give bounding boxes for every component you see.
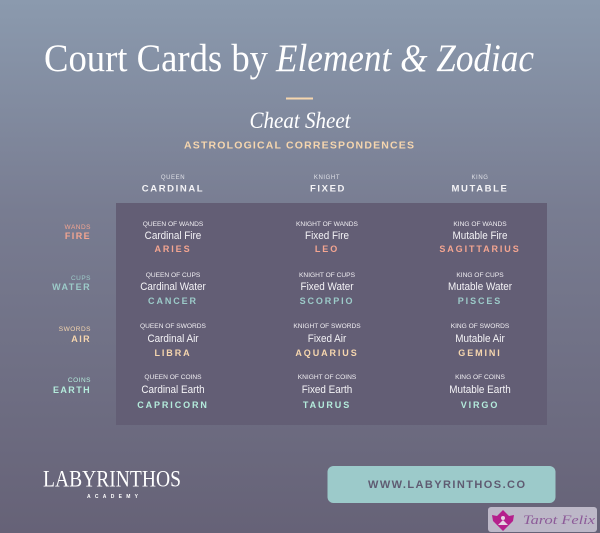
row labels: FIRE [65, 231, 91, 241]
row labels: SWORDS [59, 326, 91, 333]
panel: table background [116, 203, 547, 425]
row: earth: QUEEN OF COINS [144, 374, 202, 381]
row: earth: Mutable Earth [449, 385, 511, 396]
subheading: ASTROLOGICAL CORRESPONDENCES [184, 140, 414, 152]
row: air: QUEEN OF SWORDS [140, 323, 207, 330]
row: fire: Cardinal Fire [145, 231, 201, 242]
row: air: Cardinal Air [147, 334, 199, 345]
title [44, 37, 534, 80]
logo: Labyrinthos Academy: ACADEMY [87, 494, 139, 500]
website button: WWW.LABYRINTHOS.CO [368, 479, 525, 491]
row: water: Mutable Water [448, 282, 512, 293]
row: earth: Cardinal Earth [141, 385, 205, 396]
row labels: WANDS [65, 224, 91, 231]
column headers: MUTABLE [452, 184, 508, 194]
column headers: CARDINAL [142, 184, 204, 194]
row: fire: LEO [315, 244, 339, 254]
row: water: Cardinal Water [140, 282, 206, 293]
row labels: AIR [71, 334, 91, 344]
column headers: QUEEN [161, 175, 185, 181]
row: water [140, 272, 512, 306]
logo: Labyrinthos Academy: LABYRINTHOS [43, 466, 181, 492]
row: air: KNIGHT OF SWORDS [293, 323, 361, 330]
row labels: COINS [68, 377, 91, 384]
row: air: Fixed Air [308, 334, 347, 345]
row: air: AQUARIUS [295, 348, 359, 358]
row: earth [137, 374, 511, 410]
column headers: KING [471, 175, 489, 181]
row: earth: CAPRICORN [137, 400, 209, 410]
logo: Labyrinthos Academy [43, 466, 181, 500]
row: water: Fixed Water [301, 282, 354, 293]
subtitle: cheat sheet: Cheat Sheet [250, 108, 351, 133]
row: air: Mutable Air [455, 334, 505, 345]
column headers: KNIGHT [314, 175, 340, 181]
row: earth: KNIGHT OF COINS [298, 374, 357, 381]
row: fire: QUEEN OF WANDS [143, 221, 204, 228]
row labels: CUPS [71, 275, 91, 282]
row labels [52, 224, 91, 395]
icon: lotus diamond [492, 510, 514, 531]
row: fire: KNIGHT OF WANDS [296, 221, 359, 228]
row: water: QUEEN OF CUPS [146, 272, 201, 279]
title: Element & Zodiac [275, 37, 534, 80]
row labels: EARTH [53, 385, 91, 395]
row: water: SCORPIO [300, 296, 354, 306]
row: fire: SAGITTARIUS [439, 244, 521, 254]
row: fire: Fixed Fire [305, 231, 349, 242]
row: water: PISCES [458, 296, 502, 306]
row: water: KNIGHT OF CUPS [299, 272, 356, 279]
row labels: WATER [52, 282, 91, 292]
row: earth: TAURUS [303, 400, 351, 410]
website button [328, 466, 556, 503]
row: fire [143, 221, 521, 254]
row: water: KING OF CUPS [456, 272, 504, 279]
row: fire: ARIES [154, 244, 192, 254]
row: water: CANCER [148, 296, 198, 306]
row: fire: KING OF WANDS [453, 221, 507, 228]
watermark: Tarot Felix [488, 507, 597, 532]
title divider [286, 98, 313, 100]
row: fire: Mutable Fire [453, 231, 508, 242]
column headers [142, 175, 508, 194]
row: air [140, 323, 510, 358]
column headers: FIXED [310, 184, 346, 194]
row: earth: KING OF COINS [455, 374, 506, 381]
row: air: LIBRA [154, 348, 192, 358]
watermark text: Tarot Felix [523, 512, 595, 527]
row: earth: Fixed Earth [302, 385, 352, 396]
title: Court Cards by [44, 37, 268, 80]
row: earth: VIRGO [461, 400, 499, 410]
row: air: GEMINI [458, 348, 502, 358]
row: air: KING OF SWORDS [451, 323, 510, 330]
